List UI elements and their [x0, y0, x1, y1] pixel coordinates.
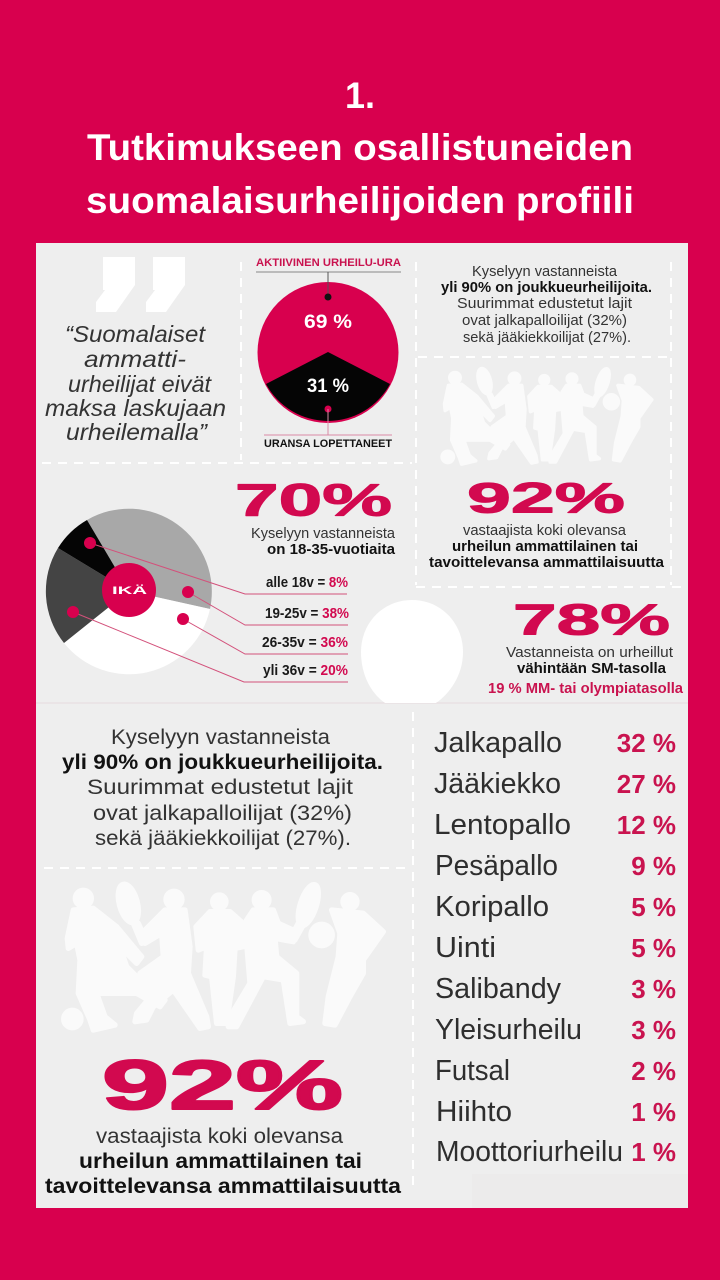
- sport names: Yleisurheilu: [435, 1014, 582, 1046]
- panel: team athletes (upper): ovat jalkapalloilijat (32%): [462, 312, 627, 329]
- description: 19 % MM- tai olympiatasolla: [488, 680, 684, 697]
- sport names: Jalkapallo: [434, 727, 562, 759]
- description: vastaajista koki olevansa: [463, 522, 627, 539]
- sport percentages: 2 %: [631, 1056, 676, 1086]
- sport names: Hiihto: [436, 1096, 512, 1128]
- description: [45, 1124, 402, 1198]
- sport percentages: [617, 728, 676, 1167]
- age description: Kyselyyn vastanneista: [251, 525, 396, 542]
- description: vastaajista koki olevansa: [96, 1124, 343, 1148]
- panel: team athletes (lower): sekä jääkiekkoilijat (27%).: [95, 826, 351, 850]
- sport percentages: 5 %: [631, 892, 676, 922]
- icon: quotation marks: [96, 257, 185, 312]
- sport percentages: 3 %: [631, 974, 676, 1004]
- sport names: [434, 727, 623, 1168]
- age description: on 18-35-vuotiaita: [267, 541, 396, 558]
- description: vähintään SM-tasolla: [517, 660, 667, 677]
- pie: active 69 %: [258, 282, 398, 423]
- description: [488, 644, 684, 697]
- panel: team athletes (lower): ovat jalkapalloilijat (32%): [93, 801, 352, 825]
- title: suomalaisurheilijoiden profiili: [86, 180, 634, 221]
- sport percentages: 1 %: [631, 1097, 676, 1127]
- panel: team athletes (upper): [441, 263, 652, 346]
- value 31 %: 31 %: [307, 376, 349, 397]
- description: urheilun ammattilainen tai: [452, 538, 638, 555]
- age legend: 26-35v = 36%: [262, 635, 348, 651]
- description: urheilun ammattilainen tai: [79, 1149, 362, 1173]
- sport percentages: 27 %: [617, 769, 676, 799]
- sport names: Pesäpallo: [435, 850, 558, 882]
- panel: quote: [45, 257, 226, 445]
- title: [86, 75, 634, 221]
- panel: career pie chart: [256, 257, 401, 450]
- icon: athletes silhouette (upper): [442, 367, 652, 464]
- quote text: urheilijat eivät: [68, 371, 213, 397]
- sport percentages: 9 %: [631, 851, 676, 881]
- icon: white head shape: [361, 600, 463, 703]
- sport percentages: 3 %: [631, 1015, 676, 1045]
- panel: age: [46, 474, 396, 682]
- panel: team athletes (lower): yli 90% on joukkueurheilijoita.: [62, 750, 383, 774]
- panel: team athletes (upper): Suurimmat edustetut lajit: [457, 295, 633, 312]
- age legend: 19-25v = 38%: [265, 606, 349, 622]
- description: Vastanneista on urheillut: [506, 644, 674, 661]
- icon: athletes silhouette (lower): [64, 882, 383, 1030]
- title: 1.: [345, 75, 375, 116]
- panel: team athletes (lower): Kyselyyn vastanneista: [111, 725, 330, 749]
- description: [429, 522, 665, 571]
- panel: team athletes (lower): Suurimmat edustetut lajit: [87, 775, 353, 799]
- quote text: ammatti-: [84, 346, 186, 372]
- sport names: Moottoriurheilu: [436, 1136, 623, 1168]
- stat 92%: 92%: [467, 474, 625, 522]
- sport names: Uinti: [435, 932, 496, 964]
- stat 92%: 92%: [102, 1046, 343, 1124]
- sport names: Lentopallo: [434, 809, 571, 841]
- sport names: Jääkiekko: [434, 768, 561, 800]
- quote text: [45, 321, 226, 445]
- value 69 %: 69 %: [304, 312, 352, 333]
- panel: 92% professional (upper): [429, 474, 665, 571]
- age legend: [262, 575, 349, 679]
- stat 78%: 78%: [513, 596, 670, 644]
- quote text: urheilemalla”: [66, 419, 208, 445]
- age pie chart: [46, 509, 348, 682]
- age legend: yli 36v = 20%: [263, 663, 348, 679]
- panel: 92% professional (lower): [45, 1046, 402, 1198]
- label: retired: URANSA LOPETTANEET: [264, 438, 392, 450]
- panel: team athletes (upper): yli 90% on joukkueurheilijoita.: [441, 279, 652, 296]
- age pie chart: IKÄ: [112, 584, 147, 597]
- panel: sports list: [434, 727, 676, 1168]
- panel: team athletes (upper): Kyselyyn vastanneista: [472, 263, 618, 280]
- sport names: Futsal: [435, 1055, 510, 1087]
- title: Tutkimukseen osallistuneiden: [87, 127, 633, 168]
- sport percentages: 32 %: [617, 728, 676, 758]
- sport names: Koripallo: [435, 891, 549, 923]
- sport percentages: 12 %: [617, 810, 676, 840]
- panel: 78% level: [488, 596, 684, 697]
- age description: [251, 525, 396, 558]
- sport percentages: 5 %: [631, 933, 676, 963]
- stat 70%: 70%: [235, 474, 392, 526]
- panel: team athletes (lower): [62, 725, 383, 850]
- sport percentages: 1 %: [631, 1137, 676, 1167]
- label: active career: AKTIIVINEN URHEILU-URA: [256, 257, 401, 269]
- description: tavoittelevansa ammattilaisuutta: [45, 1174, 402, 1198]
- pie: retired 31 %: [266, 352, 390, 421]
- age legend: alle 18v = 8%: [266, 575, 348, 591]
- quote text: maksa laskujaan: [45, 395, 226, 421]
- description: tavoittelevansa ammattilaisuutta: [429, 554, 665, 571]
- sport names: Salibandy: [435, 973, 561, 1005]
- quote text: “Suomalaiset: [65, 321, 207, 347]
- panel: team athletes (upper): sekä jääkiekkoilijat (27%).: [463, 329, 631, 346]
- panel: background: [36, 243, 688, 1208]
